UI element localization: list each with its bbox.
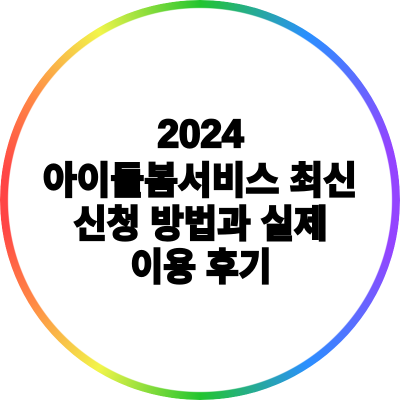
title: 아이돌봄서비스 최신	[43, 160, 357, 202]
title: 이용 후기	[130, 246, 272, 288]
title: 2024	[158, 113, 244, 156]
title: 신청 방법과 실제	[74, 203, 328, 245]
